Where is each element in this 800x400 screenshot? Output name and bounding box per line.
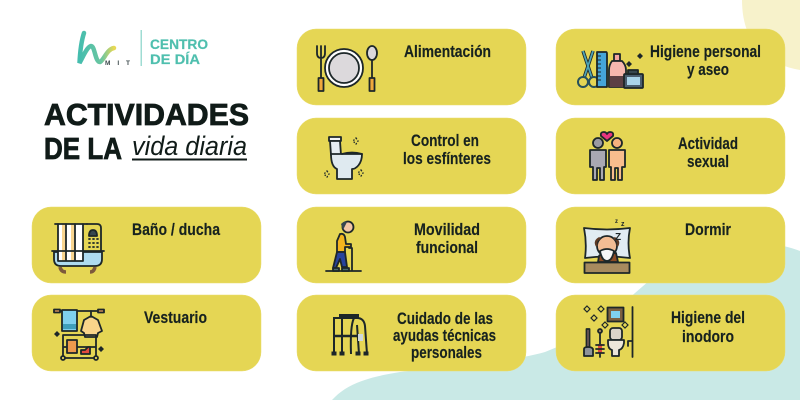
logo <box>80 30 208 67</box>
card: Movilidad funcional <box>297 207 526 283</box>
label: y aseo <box>687 61 729 79</box>
icon: toilet <box>324 137 363 179</box>
icon: plate and cutlery <box>317 46 377 91</box>
card: Higiene personal y aseo <box>556 29 785 105</box>
label <box>403 132 491 168</box>
label: Movilidad <box>414 221 480 239</box>
label: Higiene del <box>671 309 745 327</box>
icon: elderly person with cane <box>326 221 361 271</box>
label <box>650 43 761 79</box>
icon: sleeping man <box>584 219 630 273</box>
background blob: pale teal <box>332 242 800 400</box>
label <box>414 221 480 257</box>
label: personales <box>411 344 482 362</box>
label: Cuidado de las <box>397 310 493 328</box>
title: vida diaria <box>132 131 247 161</box>
background blob: pale yellow <box>742 0 800 70</box>
card: Actividad sexual <box>556 118 785 194</box>
title: DE LA <box>44 131 122 166</box>
label <box>393 310 496 362</box>
card: Baño / ducha <box>32 207 261 283</box>
card: Vestuario <box>32 295 261 371</box>
label: Alimentación <box>404 43 491 61</box>
card: Cuidado de las ayudas técnicas personales <box>297 295 526 371</box>
icon: scissors, comb, spray and case <box>578 51 643 88</box>
label: inodoro <box>682 328 734 346</box>
icon: sleeping man: Z <box>615 232 621 243</box>
icon: sleeping man: z <box>621 221 625 228</box>
logo: DE DÍA <box>150 52 200 67</box>
card: Alimentación <box>297 29 526 105</box>
card: Control en los esfínteres <box>297 118 526 194</box>
label: ayudas técnicas <box>393 327 496 345</box>
icon: couple with heart <box>590 132 625 180</box>
icon: clean bathroom <box>584 306 632 357</box>
label <box>671 309 745 346</box>
label: funcional <box>416 239 478 257</box>
label <box>678 135 738 171</box>
label: los esfínteres <box>403 150 491 168</box>
label: sexual <box>687 153 729 171</box>
label: Vestuario <box>144 309 207 327</box>
label: Control en <box>411 132 479 150</box>
icon: sleeping man: z <box>615 219 618 225</box>
card: Higiene del inodoro <box>556 295 785 371</box>
logo: CENTRO <box>150 37 208 52</box>
label: Actividad <box>678 135 738 153</box>
icon: bathtub with shower <box>52 224 104 272</box>
card: Dormir <box>556 207 785 283</box>
label: Baño / ducha <box>132 221 221 239</box>
label: Higiene personal <box>650 43 761 61</box>
title: ACTIVIDADES <box>44 97 249 132</box>
label: Dormir <box>685 221 731 239</box>
icon: walker frame <box>332 314 368 355</box>
icon: clothes rack <box>54 310 104 360</box>
title <box>44 97 249 166</box>
logo: MIT <box>105 60 130 67</box>
